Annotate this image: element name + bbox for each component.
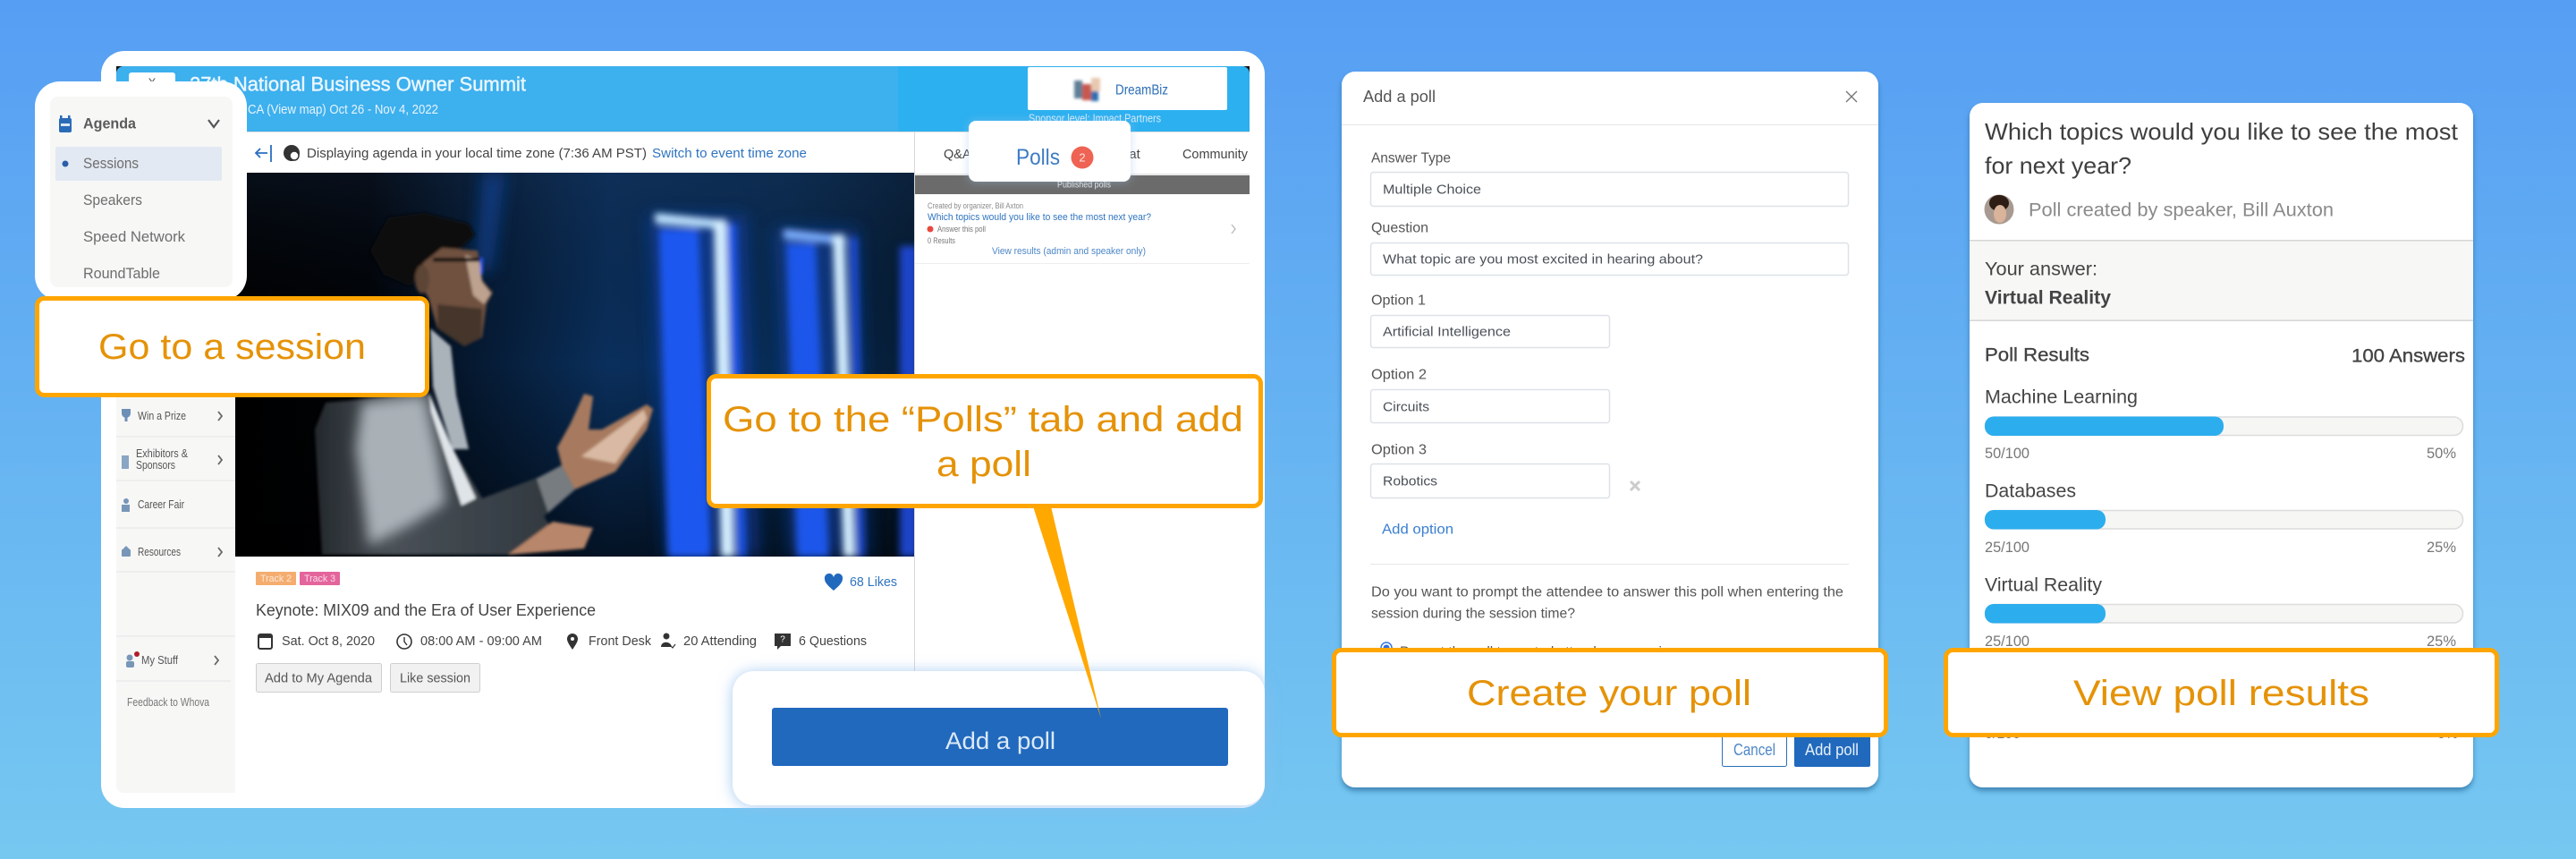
session details row: ? <box>780 635 785 644</box>
poll list item <box>915 201 1250 264</box>
field: option 2: Circuits <box>1383 399 1429 415</box>
session title: Keynote: MIX09 and the Era of User Experience <box>256 601 596 619</box>
form buttons <box>1723 729 1870 767</box>
result: machine learning: 50% <box>2427 446 2456 462</box>
panel: add a poll form <box>1342 72 1878 787</box>
callout: go to the polls tab <box>708 376 1261 719</box>
session details row <box>258 634 867 650</box>
speaker attribution: Poll created by speaker, Bill Auxton <box>2029 200 2334 220</box>
field: question <box>1370 220 1848 276</box>
sponsor card <box>1028 67 1227 125</box>
timezone bar: Switch to event time zone <box>652 147 807 161</box>
form buttons: Cancel <box>1733 741 1775 759</box>
callout: view poll results <box>1946 650 2497 736</box>
panel: agenda menu: RoundTable <box>83 266 160 282</box>
radio option: Prompt the poll to control attendance session <box>1400 644 1677 660</box>
form buttons: Add poll <box>1805 741 1859 759</box>
active item: sessions <box>55 147 222 181</box>
session action buttons: Like session <box>400 671 470 685</box>
head <box>370 213 475 286</box>
panel: add a poll button card <box>733 671 1265 805</box>
sidebar navigation: Feedback to Whova <box>127 696 209 709</box>
sponsor card: DreamBiz <box>1115 82 1168 98</box>
panel: agenda menu <box>35 81 247 301</box>
result: machine learning <box>1985 387 2463 462</box>
poll list item: Which topics would you like to see the most next year? <box>928 212 1151 223</box>
poll list item: Created by organizer, Bill Axton <box>928 201 1023 210</box>
panel: add a poll button card: Add a poll <box>945 727 1055 754</box>
published polls bar: Published polls <box>1057 181 1111 190</box>
panel: agenda menu: Speed Network <box>83 229 186 245</box>
jacket <box>315 394 575 555</box>
poll list item: View results (admin and speaker only) <box>992 246 1146 257</box>
prompt question: session during the session time? <box>1371 607 1575 621</box>
panel: polls tab highlight <box>969 121 1131 182</box>
sidebar navigation: Win a Prize <box>138 410 186 422</box>
session photo: speaker on stage <box>235 173 918 557</box>
tabs row: Q&A <box>944 148 971 162</box>
active item: sessions: Sessions <box>83 156 139 172</box>
speaker attribution <box>1984 195 2334 224</box>
result: machine learning: 50/100 <box>1985 446 2029 462</box>
sidebar navigation: My Stuff <box>141 654 178 667</box>
result: databases: 25/100 <box>1985 540 2029 556</box>
callout: view poll results: View poll results <box>2073 674 2369 713</box>
field: question: What topic are you most excited in hearing about? <box>1383 252 1703 267</box>
tabs row <box>915 148 1250 175</box>
header banner: CA (View map) Oct 26 - Nov 4, 2022 <box>248 103 438 117</box>
field: option 2: Option 2 <box>1371 367 1427 383</box>
likes: 68 Likes <box>850 575 897 590</box>
sponsor card: Sponsor level: Impact Partners <box>1029 111 1161 125</box>
callout: go to a session: Go to a session <box>98 327 366 367</box>
result: databases <box>1985 481 2463 556</box>
header banner <box>116 66 1250 132</box>
field: option 1: Artificial Intelligence <box>1383 324 1511 340</box>
tags: Track 2 <box>260 574 292 584</box>
session action buttons: Add to My Agenda <box>265 671 373 685</box>
tags <box>256 572 340 585</box>
field: answer type: Multiple Choice <box>1383 183 1481 197</box>
field: option 1: Option 1 <box>1371 293 1426 308</box>
icon: calendar <box>59 115 72 132</box>
session details row: Front Desk <box>589 634 652 649</box>
callout: go to the polls tab: a poll <box>936 445 1031 484</box>
panel: agenda menu: Speakers <box>83 192 142 208</box>
header banner: X <box>148 75 157 89</box>
result: hidden option totals <box>1985 726 2458 742</box>
sidebar navigation: Resources <box>138 546 181 558</box>
field: answer type: Answer Type <box>1371 150 1451 166</box>
callout: go to a session <box>38 299 428 395</box>
tabs row: Chat <box>1113 148 1140 162</box>
form heading: Add a poll <box>1363 88 1436 106</box>
result: hidden option totals: 0/100 <box>1985 726 2021 742</box>
timezone bar <box>256 145 807 162</box>
session details row: 08:00 AM - 09:00 AM <box>420 634 542 649</box>
field: option 3: Option 3 <box>1371 442 1427 458</box>
field: option 3: Robotics <box>1383 474 1437 489</box>
session action buttons <box>256 664 479 693</box>
agenda heading: Agenda <box>83 115 137 132</box>
field: answer type <box>1370 150 1848 206</box>
result: virtual reality: 25% <box>2427 634 2456 650</box>
your answer section <box>1970 240 2473 321</box>
session details row: Sat. Oct 8, 2020 <box>282 634 375 649</box>
results heading: Poll Results <box>1985 345 2089 365</box>
your answer section: Your answer: <box>1985 259 2097 279</box>
result: virtual reality <box>1985 574 2463 650</box>
header banner: 27th National Business Owner Summit <box>190 73 526 95</box>
hands <box>557 394 653 489</box>
add option link: Add option <box>1382 523 1453 537</box>
result: databases: Databases <box>1985 481 2076 501</box>
result: machine learning: Machine Learning <box>1985 387 2138 408</box>
poll list item: Answer this poll <box>937 225 986 234</box>
panel: event session screen <box>101 51 1265 808</box>
tabs row: Community <box>1182 148 1249 162</box>
results heading <box>1985 345 2465 367</box>
field: option 2 <box>1370 367 1610 422</box>
callout: create your poll: Create your poll <box>1467 674 1751 713</box>
question title: for next year? <box>1985 152 2131 179</box>
session details row: 20 Attending <box>683 634 757 649</box>
arrow: callout pointer to button <box>1033 506 1101 719</box>
likes <box>825 574 897 591</box>
callout: go to the polls tab: Go to the “Polls” tab and add <box>723 400 1243 439</box>
results heading: 100 Answers <box>2351 345 2465 367</box>
result: virtual reality: Virtual Reality <box>1985 574 2103 596</box>
prompt question <box>1371 585 1843 621</box>
panel: polls tab highlight: 2 <box>1079 150 1086 165</box>
question title: Which topics would you like to see the most <box>1985 118 2459 145</box>
field: option 1 <box>1370 293 1610 347</box>
poll list item: 0 Results <box>928 236 955 245</box>
field: option 3 <box>1370 442 1640 498</box>
result: hidden option totals: 0% <box>2437 726 2458 742</box>
tags: Track 3 <box>304 574 335 584</box>
sidebar navigation: Sponsors <box>136 459 175 472</box>
panel: poll results <box>1970 103 2473 787</box>
question title <box>1985 118 2459 179</box>
prompt question: Do you want to prompt the attendee to answer this poll when entering the <box>1371 585 1843 600</box>
sidebar navigation <box>116 132 235 793</box>
result: databases: 25% <box>2427 540 2456 556</box>
field: question: Question <box>1371 220 1428 236</box>
published polls bar <box>915 175 1250 194</box>
sidebar navigation: Career Fair <box>138 498 184 511</box>
callout: create your poll <box>1335 650 1885 736</box>
panel: polls tab highlight: Polls <box>1016 145 1060 170</box>
result: virtual reality: 25/100 <box>1985 634 2029 650</box>
sidebar navigation: Exhibitors & <box>136 447 189 460</box>
timezone bar: Displaying agenda in your local time zone (7:36 AM PST) <box>307 147 647 161</box>
your answer section: Virtual Reality <box>1985 288 2111 308</box>
divider <box>914 132 915 671</box>
session details row: 6 Questions <box>799 634 867 649</box>
